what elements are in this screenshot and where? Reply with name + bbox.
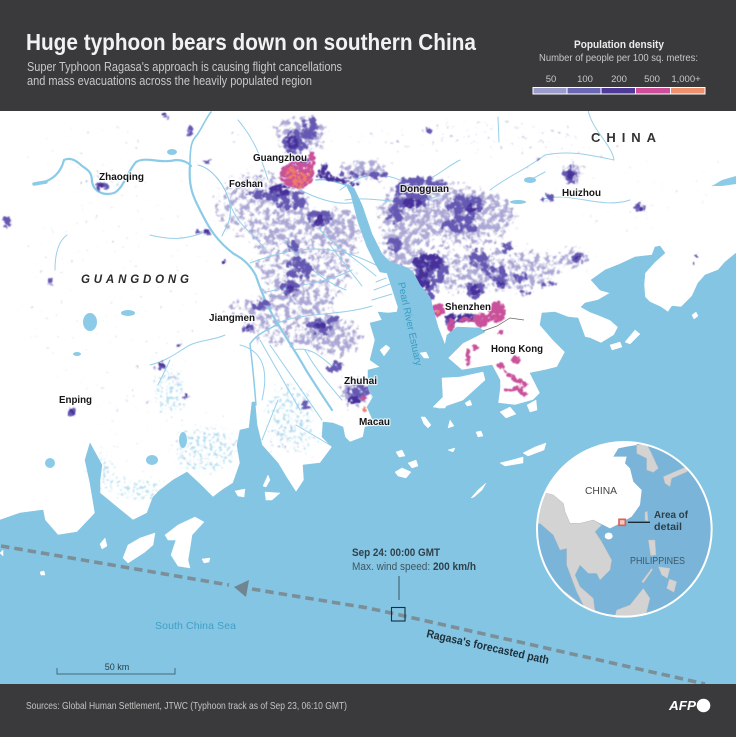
globe: neighbouring countries <box>530 444 687 622</box>
legend: Number of people per 100 sq. metres: <box>539 52 698 64</box>
sea <box>0 185 736 684</box>
leader line <box>398 576 400 600</box>
subtitle: and mass evacuations across the heavily populated region <box>27 74 312 88</box>
city labels: Zhaoqing <box>99 171 144 183</box>
legend <box>533 39 705 94</box>
legend: 50 <box>546 74 556 85</box>
city labels: Jiangmen <box>209 312 255 324</box>
scale bar: 50 km <box>105 662 129 672</box>
label: forecast path: Ragasa's forecasted path <box>425 628 550 667</box>
city labels: Hong Kong <box>491 343 543 355</box>
position marker <box>392 576 405 621</box>
globe labels: PHILIPPINES <box>630 556 685 567</box>
city labels: Dongguan <box>400 183 449 195</box>
city labels <box>59 152 601 428</box>
ring branch <box>198 165 230 236</box>
city labels: Foshan <box>229 178 263 190</box>
globe: leader <box>628 520 650 524</box>
Xi river upper <box>34 159 191 194</box>
city labels: Shenzhen <box>445 301 491 313</box>
legend: 500 <box>644 74 660 85</box>
population density: highest <box>254 166 500 413</box>
label: Sep 24 position: Max. wind speed: 200 km/h <box>352 561 476 573</box>
label: CHINA: CHINA <box>591 130 657 145</box>
globe ocean <box>537 442 712 617</box>
legend: 200 <box>611 74 627 85</box>
globe: area of detail box <box>619 519 625 525</box>
typhoon path <box>1 546 705 684</box>
thin delta channels <box>55 110 630 445</box>
rivers <box>34 110 630 445</box>
Xi west branch <box>250 324 278 405</box>
subtitle: Super Typhoon Ragasa's approach is causing flight cancellations <box>27 60 342 74</box>
title: Huge typhoon bears down on southern China <box>26 29 476 55</box>
lake at river head <box>34 182 46 184</box>
city labels: Macau <box>359 416 390 428</box>
Xi river lower <box>190 165 332 410</box>
city labels: Enping <box>59 394 92 406</box>
pale wetland texture <box>82 180 323 506</box>
population density: light <box>163 113 595 410</box>
globe labels <box>585 485 688 567</box>
label: GUANGDONG: GUANGDONG <box>81 274 189 286</box>
city labels: Zhuhai <box>344 375 377 387</box>
label: Sep 24 position: Sep 24: 00:00 GMT <box>352 547 440 559</box>
header panel <box>0 0 736 111</box>
scale bar <box>57 662 175 674</box>
Shenzhen-Hong Kong border <box>483 318 524 331</box>
Pearl River <box>316 180 350 186</box>
marker box <box>392 608 405 621</box>
globe labels: CHINA <box>585 485 617 497</box>
label: South China Sea: South China Sea <box>155 620 236 632</box>
Hong Kong density <box>465 330 530 397</box>
locator globe <box>530 435 712 622</box>
legend: 1,000+ <box>671 74 701 85</box>
population density: high <box>279 150 506 401</box>
legend: 100 <box>577 74 593 85</box>
globe labels: Area of <box>654 509 688 521</box>
globe rim <box>537 442 712 617</box>
population density: medium <box>0 110 647 434</box>
population density: dark <box>67 111 700 416</box>
Xi north branch <box>190 112 211 165</box>
subtitle <box>27 60 342 88</box>
label: Pearl River Estuary: Pearl River Estuary <box>395 281 423 367</box>
label: Sep 24 position <box>352 547 476 573</box>
sources: Sources: Global Human Settlement, JTWC (Typhoon track as of Sep 23, 06:10 GMT) <box>26 700 347 712</box>
footer panel <box>0 684 736 737</box>
AFP logo <box>668 698 710 713</box>
population density: sparse scatter <box>27 120 719 472</box>
lakes <box>45 149 736 468</box>
city labels: Huizhou <box>562 187 601 199</box>
islands <box>0 312 698 575</box>
globe labels: detail <box>654 521 682 533</box>
arrowhead <box>234 580 249 597</box>
city labels: Guangzhou <box>253 152 307 164</box>
globe: Hainan <box>605 533 613 539</box>
globe: China <box>546 443 642 528</box>
forecast dashes <box>1 546 229 585</box>
map <box>0 110 736 684</box>
legend: Population density <box>574 39 665 51</box>
AFP logo: AFP <box>668 698 696 713</box>
